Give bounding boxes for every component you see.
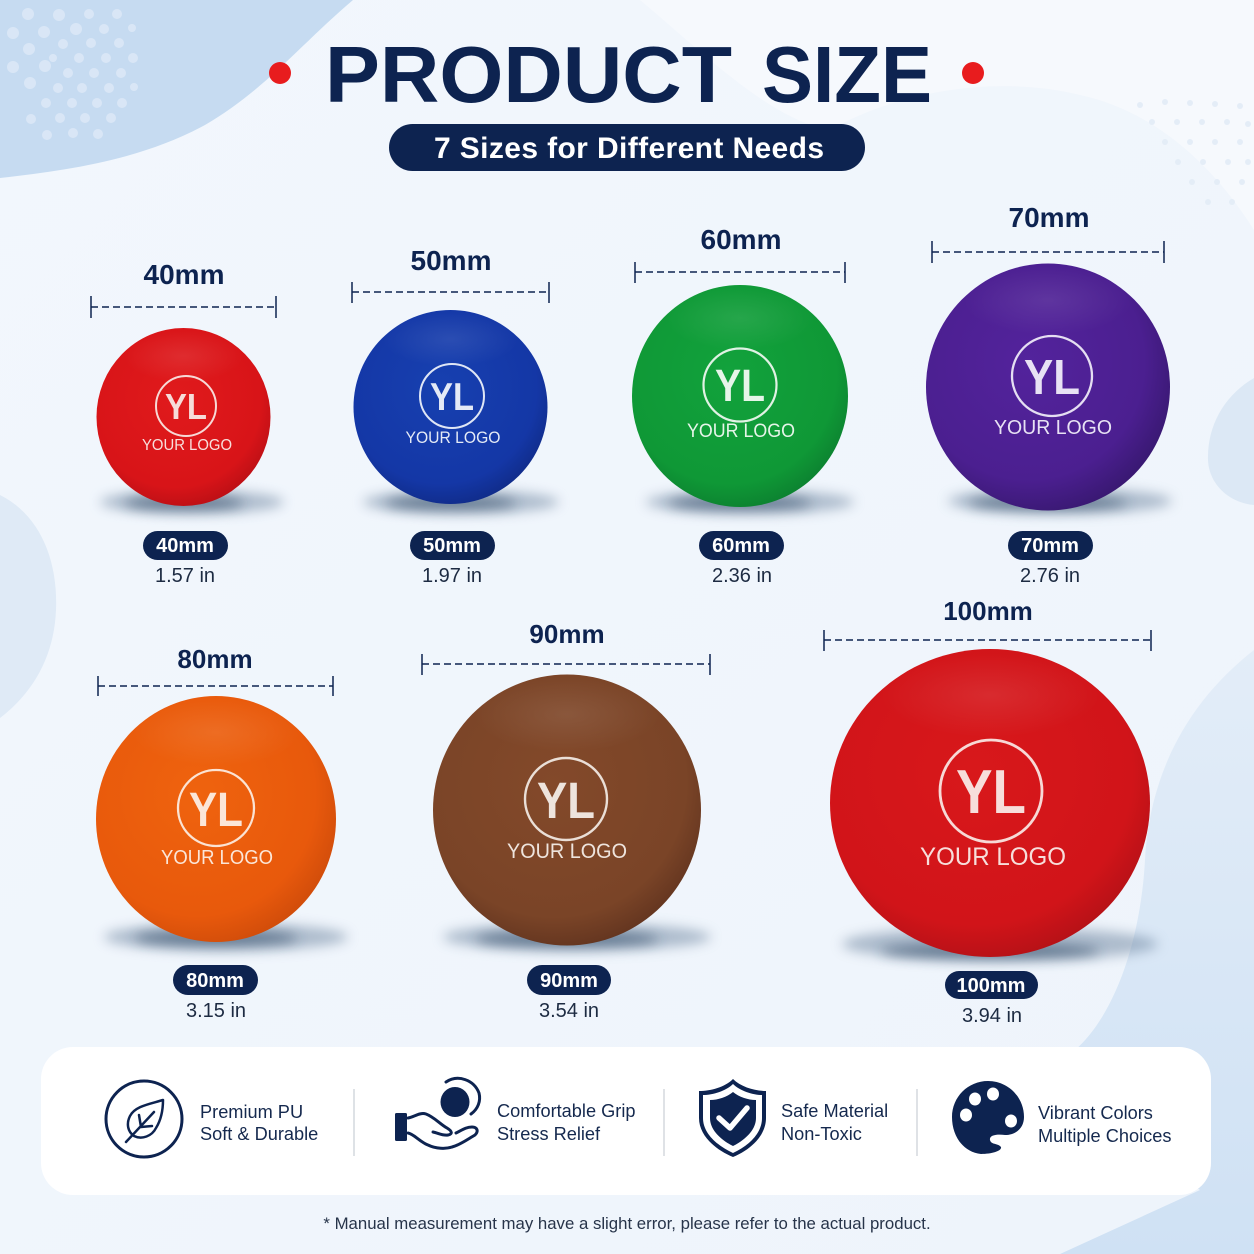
size pill: 40mm [143,531,228,560]
ball group: 40mm [91,259,284,587]
size pill: 90mm: 90mm [540,970,598,992]
ball: blue 50mm [354,310,548,504]
dots pattern [7,8,138,140]
icon: shield [699,1079,766,1157]
dimension: 80mm [98,644,333,696]
subtitle pill [389,124,865,171]
dimension: 60mm: 60mm [701,224,781,255]
title: SIZE [762,30,932,119]
ball: purple 70mm: YL [1024,351,1080,405]
size pill: 50mm: 50mm [423,535,481,557]
dimension: 90mm [422,619,710,675]
size pill: 70mm [1008,531,1093,560]
icon: leaf [106,1081,182,1157]
ball group: 70mm [926,202,1172,587]
dimension: 90mm: 90mm [529,619,605,649]
dimension: 40mm [91,259,276,318]
ball group: 60mm [632,224,854,587]
size pill: 40mm: 40mm [156,535,214,557]
dimension: 100mm [824,596,1151,651]
dimension: 100mm: 100mm [943,596,1033,626]
ball group: 80mm [96,644,348,1022]
ball: green 60mm: YL [715,360,765,411]
ball: orange 80mm [96,696,336,942]
title: PRODUCT [325,30,732,119]
text: Premium PU: Soft & Durable [200,1124,318,1144]
ball: purple 70mm: YOUR LOGO [994,417,1112,439]
inches: 1.57 in: 1.57 in [155,565,215,587]
text: Comfortable Grip: Comfortable Grip [497,1101,635,1121]
inches: 3.94 in: 3.94 in [962,1005,1022,1027]
inches: 1.97 in: 1.97 in [422,565,482,587]
size pill: 60mm [699,531,784,560]
text: Safe Material: Safe Material [781,1101,888,1121]
ball: red 40mm: YOUR LOGO [142,437,232,454]
dimension: 40mm: 40mm [144,259,224,290]
ball: orange 80mm: YL [189,784,243,837]
size pill: 90mm [527,965,611,995]
text: Vibrant Colors: Multiple Choices [1038,1126,1171,1146]
inches: 3.54 in: 3.54 in [539,1000,599,1022]
footnote: * Manual measurement may have a slight error, please refer to the actual product. [323,1214,931,1233]
ball: red 40mm [96,328,270,506]
size pill: 80mm [173,965,258,995]
size pill: 60mm: 60mm [712,535,770,557]
ball group: 100mm [824,596,1158,1027]
ball: brown 90mm: YL [537,772,595,829]
panel: features [41,1047,1211,1195]
ball: brown 90mm [433,674,701,946]
size pill: 70mm: 70mm [1021,535,1079,557]
ball: red 100mm [830,649,1150,957]
ball: blue 50mm: YL [430,376,474,419]
dimension: 80mm: 80mm [177,644,253,674]
dimension: 50mm: 50mm [411,245,491,276]
inches: 2.76 in: 2.76 in [1020,565,1080,587]
icon: palette [952,1081,1024,1154]
ball: orange 80mm: YOUR LOGO [161,847,273,869]
size pill: 100mm: 100mm [957,975,1025,997]
size pill: 80mm: 80mm [186,970,244,992]
ball: green 60mm [632,285,848,507]
dimension: 70mm [932,202,1164,263]
text: Comfortable Grip: Stress Relief [497,1124,601,1144]
dimension: 70mm: 70mm [1009,202,1089,233]
ball: blue 50mm: YOUR LOGO [406,428,500,447]
ball: red 40mm: YL [165,386,207,427]
icon: hand and ball [395,1078,480,1148]
dimension: 50mm [352,245,549,303]
ball: brown 90mm: YOUR LOGO [507,840,627,863]
ball: red 100mm: YOUR LOGO [920,843,1066,871]
inches: 3.15 in: 3.15 in [186,1000,246,1022]
text: Premium PU: Premium PU [200,1102,303,1122]
ball: red 100mm: YL [956,758,1026,827]
ball: purple 70mm [926,264,1170,510]
dimension: 60mm [635,224,845,283]
title [269,30,984,119]
size pill: 100mm [945,971,1038,999]
size pill: 50mm [410,531,495,560]
ball: green 60mm: YOUR LOGO [687,421,795,442]
ball group: 50mm [352,245,559,587]
text: Vibrant Colors: Vibrant Colors [1038,1103,1153,1123]
inches: 2.36 in: 2.36 in [712,565,772,587]
text: Safe Material: Non-Toxic [781,1124,862,1144]
ball group: 90mm [422,619,711,1022]
subtitle pill: 7 Sizes for Different Needs [434,132,824,165]
